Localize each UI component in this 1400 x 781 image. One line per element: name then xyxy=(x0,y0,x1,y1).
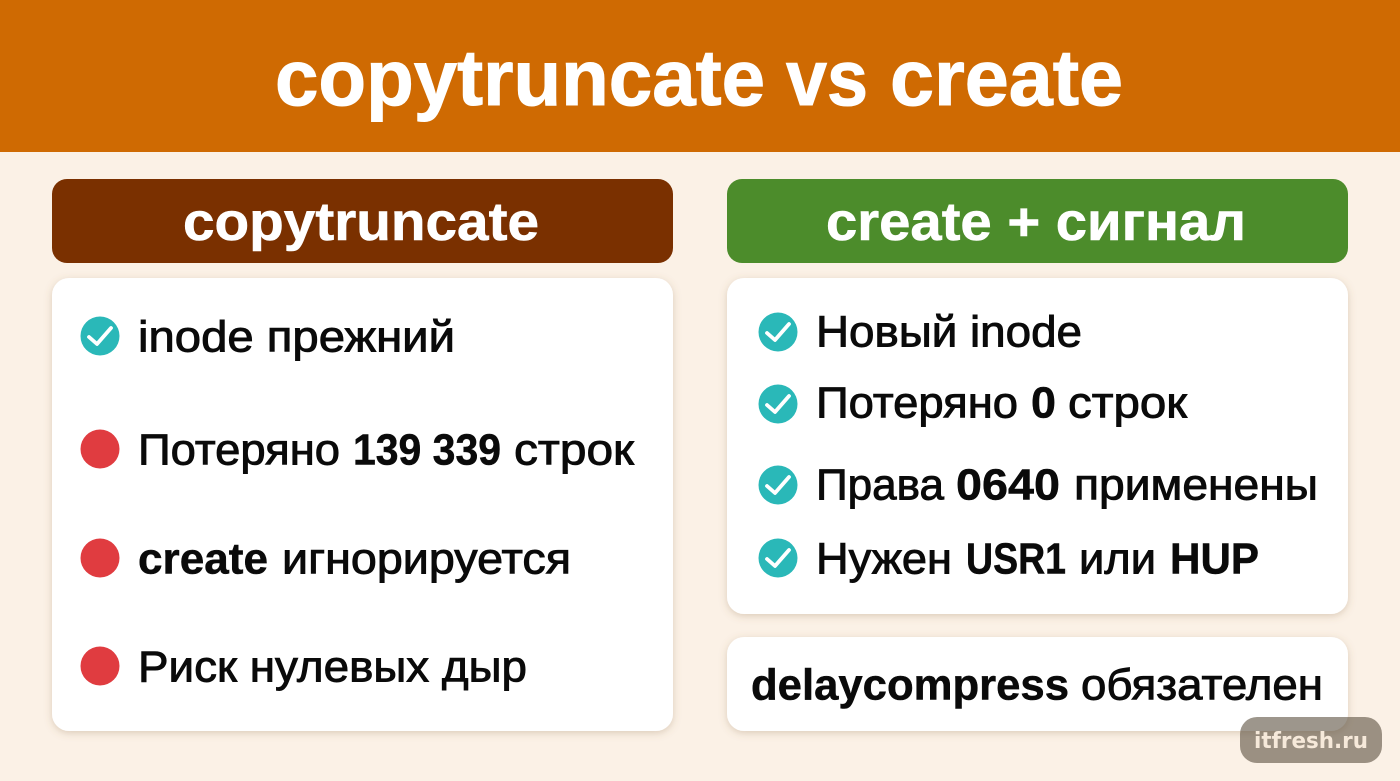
item: permissions applied: Права xyxy=(816,462,945,510)
callout: delaycompress: delaycompress xyxy=(751,662,1069,710)
item: sparse file risk: Риск нулевых дыр xyxy=(138,644,527,692)
heading: copytruncate xyxy=(52,179,673,263)
item: permissions applied xyxy=(758,462,1318,510)
heading: create + signal xyxy=(727,179,1348,263)
title banner xyxy=(0,0,1400,152)
item: signal required: или xyxy=(1079,536,1156,584)
watermark badge: itfresh.ru xyxy=(1254,729,1368,754)
panel: create + signal xyxy=(727,278,1348,614)
item: inode unchanged: inode прежний xyxy=(138,314,455,362)
item: create ignored xyxy=(80,536,571,584)
item: lines lost: строк xyxy=(514,426,635,474)
callout: delaycompress: обязателен xyxy=(1081,662,1323,710)
watermark badge xyxy=(1240,717,1382,763)
item: signal required: USR1 xyxy=(966,536,1066,584)
panel: copytruncate xyxy=(52,278,673,731)
item: zero lines lost: строк xyxy=(1068,380,1188,428)
item: create ignored: игнорируется xyxy=(282,536,571,584)
item: lines lost: Потеряно xyxy=(138,426,340,474)
item: zero lines lost xyxy=(758,380,1188,428)
item: permissions applied: применены xyxy=(1074,462,1318,510)
title: create xyxy=(890,33,1123,122)
item: signal required: HUP xyxy=(1170,536,1259,584)
heading: copytruncate: copytruncate xyxy=(183,192,539,252)
item: permissions applied: 0640 xyxy=(956,462,1060,510)
title: vs xyxy=(786,33,868,122)
item: zero lines lost: 0 xyxy=(1031,380,1056,428)
item: lines lost xyxy=(80,426,635,474)
item: lines lost: 139 339 xyxy=(353,426,501,474)
item: signal required xyxy=(758,536,1259,584)
item: new inode: Новый inode xyxy=(816,308,1082,356)
item: create ignored: create xyxy=(138,536,268,584)
heading: create + signal: create + сигнал xyxy=(826,192,1246,252)
callout: delaycompress xyxy=(727,637,1348,731)
item: signal required: Нужен xyxy=(816,536,952,584)
item: zero lines lost: Потеряно xyxy=(816,380,1018,428)
title xyxy=(275,33,1123,122)
title: copytruncate xyxy=(275,33,765,122)
